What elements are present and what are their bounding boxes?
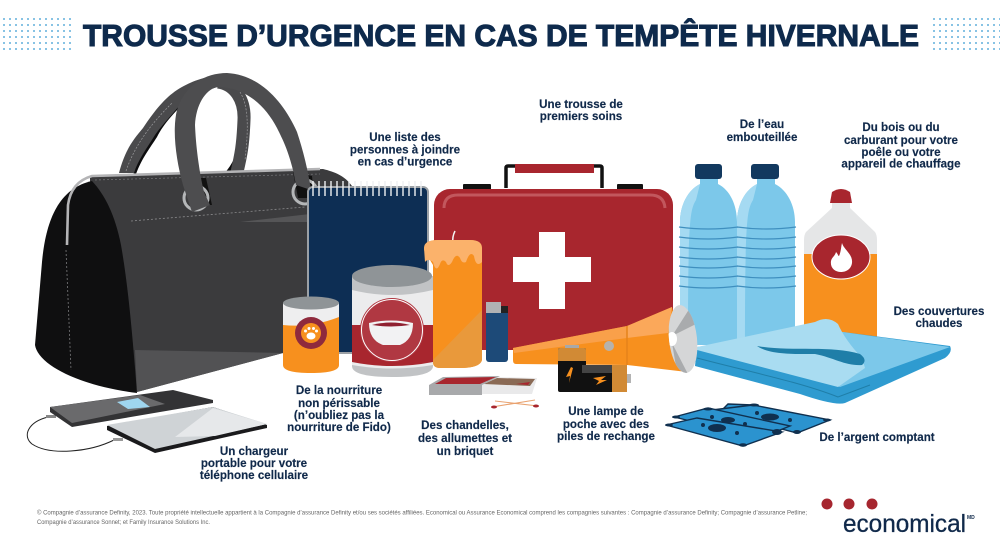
- label: candles: un briquet: [437, 445, 493, 458]
- decorative dots right: [931, 16, 1000, 52]
- label: flashlight: poche avec des: [563, 418, 649, 431]
- label: food: De la nourriture: [296, 384, 383, 397]
- back handle: [119, 76, 247, 174]
- footer legal text: Compagnie d’assurance Sonnet; et Family Insurance Solutions Inc.: [37, 519, 210, 526]
- label: flashlight: piles de rechange: [557, 430, 656, 443]
- label: flashlight: Une lampe de: [568, 405, 644, 418]
- lens: [668, 305, 698, 373]
- footer legal text: © Compagnie d’assurance Definity, 2023. Toute propriété intellectuelle appartient à la Compagnie d’assurance Definity et/ou ses sociétés affiliées. Economical ou Assurance Economical comprend les compagnies suivantes : Compagnie d’assurance Definity; Compagnie d’assurance Petline;: [37, 508, 807, 516]
- economical logo: MD: [967, 515, 975, 521]
- icon: black duffel bag: [35, 73, 352, 393]
- icon: soup can: [352, 265, 433, 377]
- icon: batteries: [558, 345, 631, 392]
- icon: power bank and phone: [27, 390, 267, 453]
- icon: lighter: [486, 302, 508, 362]
- economical logo: economical: [843, 510, 966, 538]
- icon: candle: [424, 231, 482, 368]
- label: fuel: Du bois ou du: [862, 121, 940, 134]
- label: fuel: poêle ou votre: [861, 146, 941, 159]
- title: TROUSSE D’URGENCE EN CAS DE TEMPÊTE HIVERNALE: [83, 17, 919, 53]
- label: contacts list: personnes à joindre: [350, 144, 461, 156]
- label: charger: portable pour votre: [201, 457, 308, 470]
- icon: water bottles: [679, 164, 796, 345]
- decorative dots left: [1, 16, 73, 52]
- label: contacts list: en cas d’urgence: [358, 156, 453, 168]
- icon: matchbox: [429, 376, 537, 395]
- icon: paw: [304, 327, 318, 340]
- label: contacts list: Une liste des: [369, 131, 441, 144]
- front handle: [175, 73, 311, 212]
- label: bottled water: embouteillée: [727, 131, 798, 144]
- icon: cash bills: [665, 404, 831, 447]
- icon: notepad: [308, 181, 428, 353]
- label: first aid kit: Une trousse de: [539, 98, 623, 111]
- label: bottled water: De l’eau: [740, 118, 784, 131]
- label: food: nourriture de Fido): [287, 421, 391, 434]
- footer legal text: [37, 508, 807, 526]
- icon: fuel jug: [804, 189, 877, 340]
- label: charger: Un chargeur: [220, 445, 289, 458]
- icon: first aid kit: [434, 164, 673, 350]
- economical logo: [822, 498, 975, 538]
- back bills: [666, 404, 830, 446]
- label: fuel: carburant pour votre: [844, 134, 959, 147]
- label: food: non périssable: [298, 397, 380, 410]
- icon: bowl: [369, 320, 413, 345]
- label: cash: De l’argent comptant: [819, 431, 935, 444]
- icon: matches: [491, 400, 539, 408]
- label: charger: téléphone cellulaire: [200, 469, 309, 482]
- icon: folded blankets: [695, 319, 951, 404]
- label: candles: des allumettes et: [418, 432, 512, 445]
- label: blankets: chaudes: [915, 317, 963, 330]
- icon: flashlight: [513, 305, 698, 373]
- label: first aid kit: premiers soins: [540, 110, 622, 123]
- white cross: [513, 232, 591, 309]
- icon: flame: [831, 243, 852, 272]
- icon: pet food can: [283, 296, 339, 373]
- label: fuel: appareil de chauffage: [841, 158, 961, 170]
- label: food: (n’oubliez pas la: [294, 409, 385, 422]
- label: blankets: Des couvertures: [894, 305, 984, 318]
- label: candles: Des chandelles,: [421, 419, 509, 432]
